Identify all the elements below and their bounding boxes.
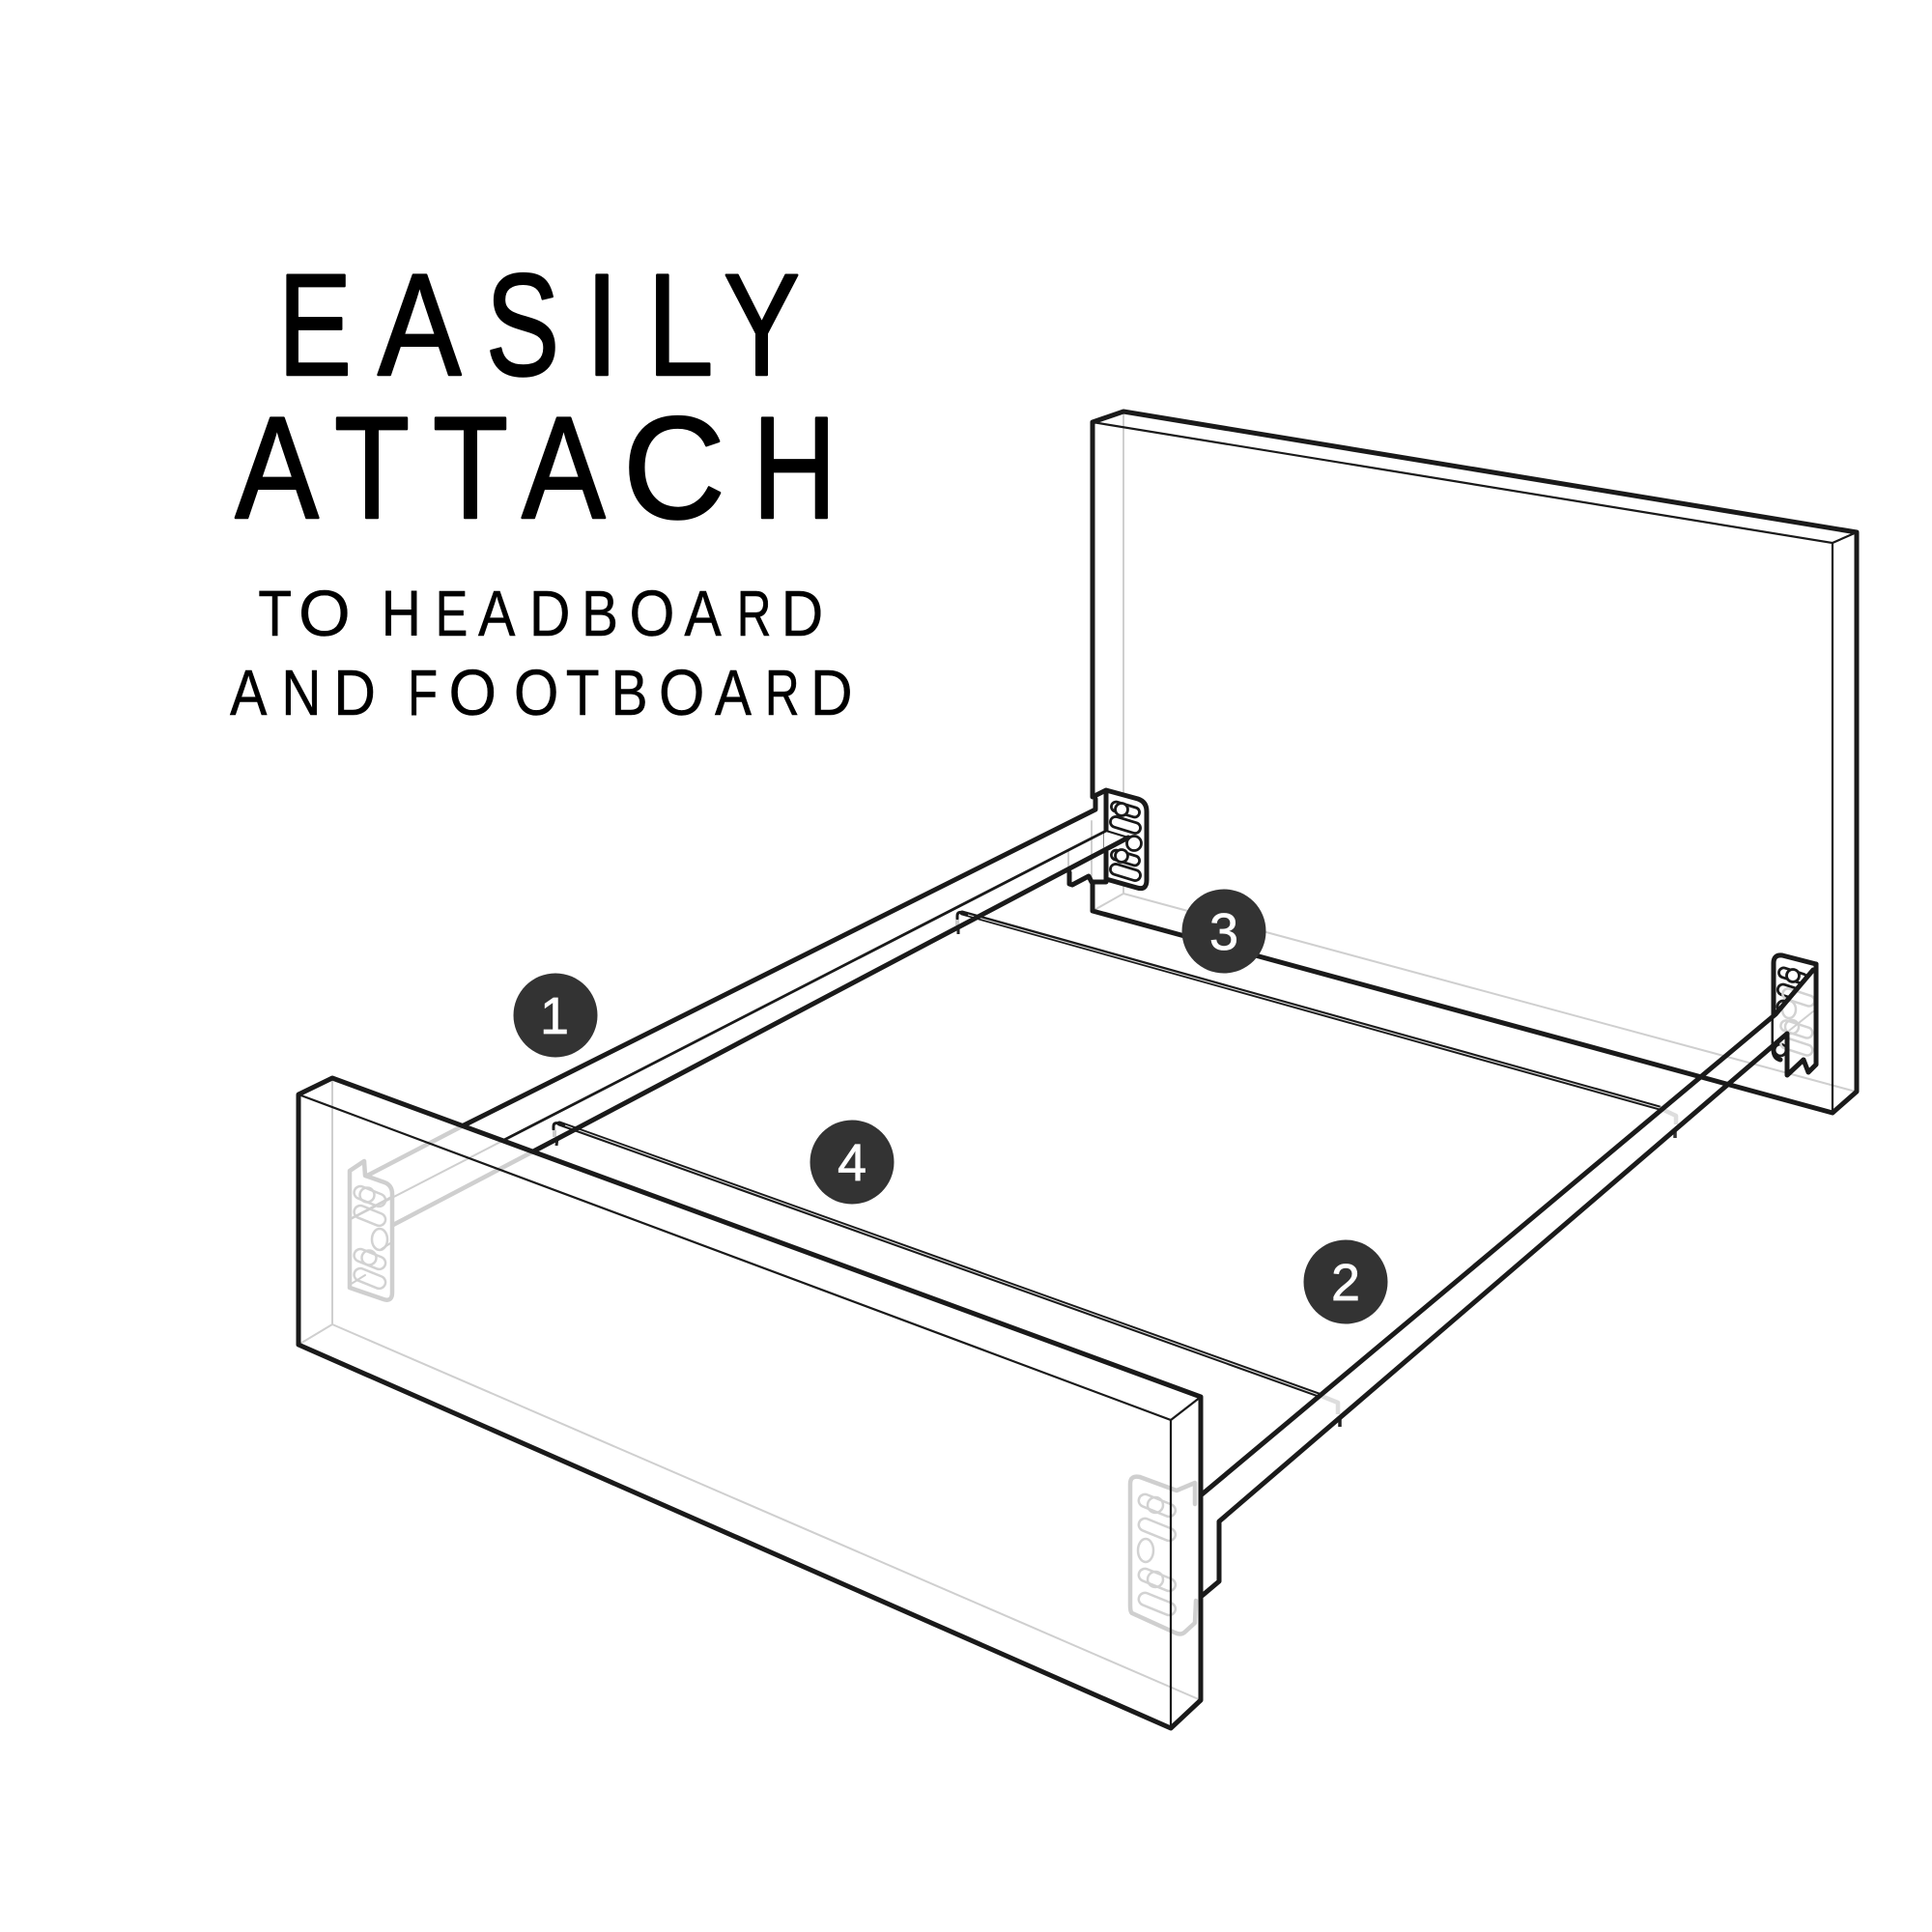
subtitle: O bbox=[448, 657, 497, 728]
subtitle: A bbox=[684, 578, 722, 650]
title: A bbox=[378, 243, 462, 406]
bracket on headboard, left rail bbox=[1093, 790, 1147, 889]
subtitle: R bbox=[765, 658, 800, 729]
front slat rod bbox=[554, 1123, 1340, 1427]
subtitle: D bbox=[810, 656, 853, 729]
subtitle: H bbox=[382, 579, 421, 650]
callout 4: 4 bbox=[838, 1134, 867, 1192]
callout 1 bbox=[514, 974, 597, 1057]
subtitle bbox=[230, 577, 853, 729]
subtitle: D bbox=[529, 579, 570, 650]
title: S bbox=[486, 244, 559, 407]
title: H bbox=[753, 386, 837, 549]
headboard bbox=[1068, 412, 1857, 1113]
subtitle: B bbox=[611, 658, 648, 729]
subtitle: D bbox=[333, 656, 376, 729]
callout 2 bbox=[1304, 1240, 1387, 1323]
subtitle: A bbox=[478, 578, 516, 650]
subtitle: R bbox=[737, 579, 772, 650]
title: C bbox=[623, 387, 725, 549]
subtitle: F bbox=[408, 656, 438, 729]
callout 2: 2 bbox=[1331, 1254, 1360, 1312]
title bbox=[236, 243, 837, 549]
subtitle: N bbox=[281, 658, 322, 729]
callout 3: 3 bbox=[1209, 903, 1238, 961]
title: A bbox=[236, 386, 319, 549]
subtitle: D bbox=[781, 577, 823, 650]
right rail bbox=[1201, 964, 1816, 1597]
footboard left grey bracket bbox=[350, 1161, 393, 1300]
callout 3 bbox=[1182, 889, 1265, 974]
left rail bbox=[351, 799, 1128, 1225]
title: L bbox=[647, 245, 714, 407]
subtitle: O bbox=[630, 577, 674, 650]
subtitle: T bbox=[258, 579, 292, 650]
title: Y bbox=[724, 244, 800, 406]
subtitle: O bbox=[298, 578, 351, 650]
subtitle: O bbox=[514, 658, 558, 729]
footboard right grey bracket bbox=[1130, 1477, 1196, 1634]
subtitle: E bbox=[436, 577, 468, 650]
subtitle: T bbox=[566, 658, 600, 729]
subtitle: O bbox=[659, 656, 704, 729]
title: A bbox=[522, 386, 606, 549]
rear slat rod bbox=[957, 912, 1676, 1138]
subtitle: A bbox=[230, 657, 268, 729]
footboard bbox=[298, 1078, 1201, 1728]
callout 1: 1 bbox=[540, 987, 569, 1045]
subtitle: B bbox=[582, 579, 618, 650]
title: T bbox=[334, 386, 410, 549]
title: T bbox=[433, 386, 508, 549]
title: E bbox=[278, 244, 352, 407]
title: I bbox=[585, 245, 618, 407]
bracket on headboard, right rail bbox=[1774, 955, 1817, 1075]
callout 4 bbox=[810, 1121, 895, 1204]
subtitle: A bbox=[715, 658, 752, 729]
